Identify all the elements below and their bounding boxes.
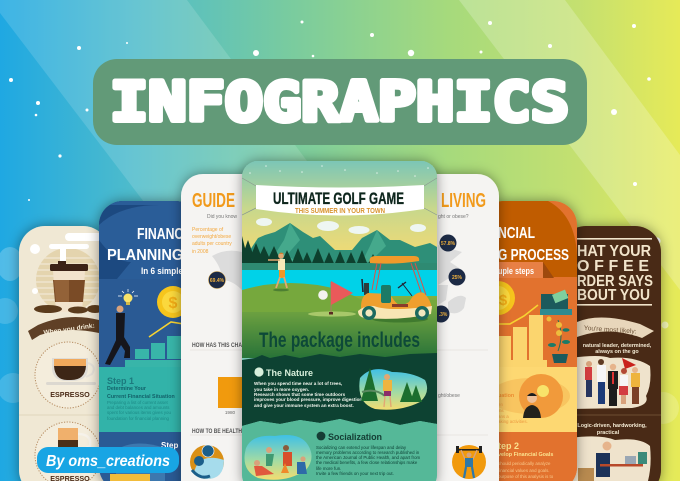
panel: step 1 yellow: aking activities. bbox=[498, 419, 528, 424]
icon: briefcase with money bbox=[540, 290, 572, 315]
illustration: person at desk bbox=[570, 436, 651, 481]
panel: step 2 orange bbox=[499, 442, 577, 481]
icon: coffee cup with sunburst bbox=[30, 233, 105, 314]
ribbon: when you drink bbox=[28, 317, 99, 340]
text: socialization body: the American Journal of Public Health, and apart from bbox=[316, 455, 421, 460]
badge: by oms_creations: By oms_creations bbox=[46, 453, 170, 470]
card: financial planning blue bbox=[91, 194, 181, 481]
card: ultimate golf game bbox=[238, 161, 437, 481]
panel: step 1 yellow: ins bbox=[498, 408, 504, 413]
heading: the package includes: The package includes bbox=[259, 329, 420, 352]
banner bbox=[256, 185, 424, 216]
heading: financial planning: FINANCIAL bbox=[137, 226, 203, 243]
panel: step 1: Preparing a list of current asset bbox=[107, 400, 169, 405]
text: socialization body: Socializing can extend your lifespan and delay bbox=[316, 445, 407, 450]
text: logic driven bbox=[577, 423, 647, 436]
text: overweight or obese: ght or obese? bbox=[438, 214, 469, 220]
text: socialization body: Invite a few friends on your next trip out. bbox=[316, 471, 394, 476]
icon: man climbing steps bbox=[105, 306, 130, 365]
card: financial planning orange bbox=[480, 201, 577, 481]
text: nature body: and give your immune system an extra boost. bbox=[254, 403, 354, 408]
ribbon: simple steps: uple steps bbox=[498, 266, 534, 276]
illustration: hiker in forest bbox=[359, 368, 427, 410]
text: nature body: you take in more oxygen. bbox=[254, 387, 309, 392]
text: nature body: When you spend time near a lot of trees, bbox=[254, 381, 342, 386]
panel: the nature bbox=[242, 353, 437, 426]
panel: step 1: Current Financial Situation bbox=[107, 394, 175, 400]
text: percentage note: overweight/obese bbox=[192, 234, 231, 240]
text: natural leader: always on the go bbox=[595, 349, 639, 355]
text: natural leader: natural leader, determined, bbox=[583, 343, 652, 349]
heading: financial planning process: G PROCESS bbox=[498, 247, 569, 264]
title text: INFOGRAPHICS bbox=[110, 70, 569, 134]
text: socialization body bbox=[316, 445, 421, 476]
text: percentage note: Percentage of bbox=[192, 227, 224, 233]
heading: what your coffee order says about you bbox=[570, 238, 653, 306]
chart: orange bar 1980 bbox=[218, 377, 242, 415]
badge: 33%: .3% bbox=[439, 312, 448, 318]
ribbon: simple steps bbox=[499, 262, 554, 278]
heading: financial planning process bbox=[499, 227, 568, 260]
icon: light bulb bbox=[118, 289, 138, 305]
ribbon: you're most likely: You're most likely: bbox=[584, 325, 637, 336]
mountains bbox=[251, 223, 437, 263]
title pill bbox=[93, 59, 587, 145]
clouds bbox=[256, 218, 426, 234]
banner title: ULTIMATE GOLF GAME bbox=[273, 189, 404, 208]
red flag bbox=[329, 281, 353, 314]
heading: financial planning: PLANNING P bbox=[107, 247, 197, 264]
heading: what your coffee order says about you: BOUT YOU bbox=[577, 287, 650, 304]
number badge 1 bbox=[254, 367, 264, 377]
icon: weightlifter bbox=[452, 445, 486, 479]
text: socialization body: memory problems according to research published in bbox=[316, 450, 420, 455]
text: percentage note bbox=[192, 227, 232, 255]
card: coffee order right bbox=[560, 226, 661, 481]
heading: financial planning process: NCIAL bbox=[498, 225, 535, 242]
text: socialization body: life more fun. bbox=[316, 466, 341, 471]
heading: socialization: Socialization bbox=[328, 432, 382, 442]
heading: the nature: The Nature bbox=[266, 368, 313, 378]
panel: step 1: spent for various items gives you bbox=[107, 410, 171, 415]
text: percentage note: adults per country bbox=[192, 241, 232, 247]
panel: step 1: and debt balances and amounts bbox=[107, 405, 170, 410]
map: world map pieces bbox=[212, 245, 466, 313]
text: nature body: Research shows that some time outdoors bbox=[254, 392, 346, 397]
heading: financial planning: In 6 simple bbox=[141, 266, 183, 276]
text: percentage note: in 2008 bbox=[192, 249, 209, 255]
text: natural leader bbox=[583, 343, 652, 355]
icon: latte cup bbox=[35, 422, 101, 481]
icon: gold coin: $ bbox=[169, 295, 178, 312]
panel: socialization bbox=[242, 419, 437, 481]
banner ropes bbox=[242, 178, 437, 215]
heading: what your coffee order says about you: HAT YOUR bbox=[577, 243, 651, 260]
golf course ground bbox=[242, 283, 437, 358]
panel: step 1 yellow: en bbox=[498, 402, 503, 407]
text: did you know: Did you know bbox=[207, 214, 237, 220]
text: overweight label: ght/obese bbox=[438, 393, 460, 399]
chart: growth bars bbox=[499, 304, 547, 367]
panel: step 2 bbox=[110, 441, 178, 481]
label: espresso: ESPRESSO bbox=[50, 390, 90, 399]
badge: 57.8%: 57.8% bbox=[441, 241, 456, 247]
heading: how has this changed: HOW HAS THIS CHA bbox=[192, 342, 242, 349]
heading: financial planning bbox=[108, 228, 181, 276]
illustration: friends at campfire bbox=[244, 435, 312, 480]
text: nature body: improves your blood pressure, improve digestion bbox=[254, 397, 362, 402]
icon: gold coin bbox=[499, 281, 515, 315]
panel: step 1 yellow bbox=[499, 367, 577, 432]
icon: sleeping with clock bbox=[190, 445, 224, 479]
icon: gold coin: $ bbox=[499, 292, 508, 309]
number badge 2 bbox=[317, 432, 325, 440]
badge: 69.4% bbox=[208, 272, 226, 288]
panel: step 1: Determine Your bbox=[107, 386, 146, 392]
panel: step 1: Step 1 bbox=[107, 376, 134, 386]
text: socialization body: the medical benefits, a few close relationships make bbox=[316, 460, 418, 465]
golfer bbox=[268, 252, 289, 291]
golf sky bbox=[242, 161, 437, 256]
golf ball bbox=[318, 290, 328, 300]
badge: by oms_creations bbox=[37, 447, 179, 473]
tree line bbox=[242, 236, 374, 263]
panel: step 2 orange: should periodically analyze bbox=[498, 461, 551, 466]
panel: step 1: foundation for financial planning bbox=[107, 416, 170, 421]
badge: 57.8% bbox=[440, 234, 456, 252]
text: nature body bbox=[254, 381, 362, 408]
ribbon: you're most likely bbox=[574, 317, 654, 338]
badge: 33% bbox=[432, 306, 450, 322]
panel: step 2: Step bbox=[161, 441, 178, 450]
icon: gold coin bbox=[157, 286, 181, 318]
card: guide to healthy living bbox=[181, 174, 499, 481]
text: logic driven: Logic-driven, hardworking, bbox=[577, 423, 647, 429]
panel: step 1 yellow: ans a bbox=[498, 414, 509, 419]
banner subtitle: THIS SUMMER IN YOUR TOWN bbox=[295, 206, 385, 215]
illustration: team of people bbox=[570, 356, 650, 409]
heading: living: LIVING bbox=[441, 190, 486, 212]
golf cart bbox=[358, 256, 432, 322]
heading: what your coffee order says about you: O F F E E bbox=[577, 258, 649, 275]
heading: how to be healthy: HOW TO BE HEALTH bbox=[192, 428, 242, 435]
panel: step 2 orange: velop Financial Goals bbox=[498, 452, 553, 458]
panel: step 2 orange: financial values and goals. bbox=[498, 468, 550, 473]
chart: growth bars bbox=[125, 321, 181, 367]
heading: what your coffee order says about you: RDER SAYS bbox=[577, 273, 653, 290]
badge: 69.4%: 69.4% bbox=[210, 278, 225, 284]
badge: 25%: 25% bbox=[452, 275, 463, 281]
lake bbox=[242, 263, 437, 304]
heading: guide: GUIDE bbox=[192, 190, 235, 212]
chart: orange bar 1980: 1980 bbox=[225, 410, 236, 415]
panel: step 2 orange: purpose of this analysis is to bbox=[498, 474, 554, 479]
ribbon: when you drink: When you drink: bbox=[43, 323, 95, 337]
icon: espresso cup bbox=[35, 342, 101, 408]
panel: step 2 orange: tep 2 bbox=[498, 441, 519, 451]
panel: step 1 yellow: uation bbox=[498, 393, 514, 399]
text: logic driven: practical bbox=[597, 430, 620, 436]
badge: 25% bbox=[448, 268, 466, 286]
card: coffee left bbox=[19, 226, 109, 481]
panel: step 1 bbox=[99, 367, 189, 432]
icon: money plant bbox=[546, 316, 570, 363]
